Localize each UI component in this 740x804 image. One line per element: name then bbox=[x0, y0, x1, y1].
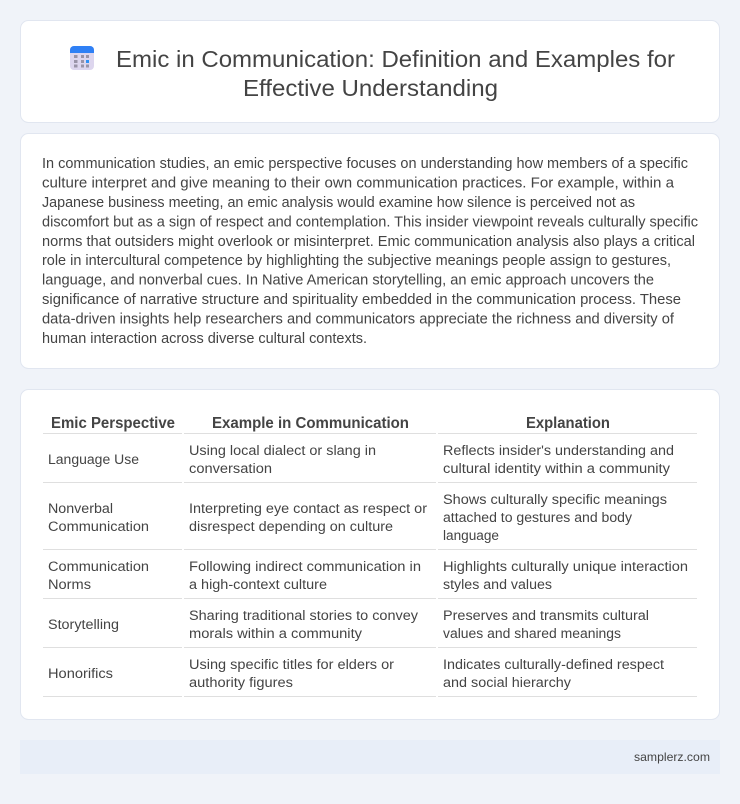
icon: calendar bbox=[70, 46, 94, 70]
table header bbox=[51, 415, 610, 432]
table row: communication norms: a high-context culture bbox=[189, 577, 327, 593]
table row: nonverbal communication: Communication bbox=[48, 519, 149, 535]
text block: introduction paragraph: language, and nonverbal cues. In Native American storytelling, an emic approach uncovers the bbox=[42, 273, 654, 289]
table row: honorifics: authority figures bbox=[189, 675, 293, 691]
table row: honorifics: and social hierarchy bbox=[443, 675, 572, 691]
panel: table card bbox=[20, 390, 720, 720]
text block: introduction paragraph: significance of narrative structure and spirituality embedded in the communication process. These bbox=[42, 292, 681, 308]
table row: language use bbox=[48, 443, 674, 477]
table row: language use: Language Use bbox=[48, 452, 139, 468]
table row: honorifics: Using specific titles for elders or bbox=[189, 657, 394, 673]
table row: language use: Reflects insider's understanding and bbox=[443, 443, 674, 459]
text block: introduction paragraph: Japanese business meeting, an emic analysis would examine how silence is perceived not as bbox=[42, 195, 635, 211]
footer bbox=[20, 740, 720, 774]
table row: storytelling: Sharing traditional stories to convey bbox=[189, 608, 419, 624]
table row: honorifics: Honorifics bbox=[48, 666, 113, 682]
title: Emic in Communication: Definition and Examples for bbox=[116, 46, 675, 72]
table row: storytelling: morals within a community bbox=[189, 626, 363, 642]
table row: nonverbal communication bbox=[48, 492, 667, 544]
table header: Example in Communication bbox=[212, 415, 409, 432]
table row: nonverbal communication: attached to gestures and body bbox=[443, 510, 633, 526]
table row: storytelling: Storytelling bbox=[48, 617, 119, 633]
table row: storytelling bbox=[48, 608, 649, 642]
text block: introduction paragraph: culture interpret and give meaning to their own communication practices. For example, within a bbox=[42, 175, 674, 191]
text block: introduction paragraph: human interaction across diverse cultural contexts. bbox=[42, 331, 367, 347]
table row: nonverbal communication: Interpreting eye contact as respect or bbox=[189, 501, 427, 517]
panel: introduction text bbox=[20, 134, 720, 368]
table row: language use: conversation bbox=[189, 461, 272, 477]
table row: communication norms: Communication bbox=[48, 559, 149, 575]
table row: honorifics bbox=[48, 657, 664, 691]
table row: communication norms: Norms bbox=[48, 577, 91, 593]
text block: introduction paragraph: In communication studies, an emic perspective focuses on understanding how members of a specific bbox=[42, 156, 688, 172]
text block: introduction paragraph bbox=[42, 156, 698, 347]
title: Effective Understanding bbox=[243, 75, 498, 101]
table header: Emic Perspective bbox=[51, 415, 175, 432]
table row: nonverbal communication: disrespect depending on culture bbox=[189, 519, 393, 535]
table row: nonverbal communication: Shows culturally specific meanings bbox=[443, 492, 667, 508]
text block: introduction paragraph: role in intercultural competence by highlighting the subjective meanings people assign to gestures, bbox=[42, 253, 671, 269]
text block: introduction paragraph: data-driven insights help researchers and communicators appreciate the richness and diversity of bbox=[42, 312, 675, 328]
table header: Explanation bbox=[526, 415, 610, 432]
table row: language use: Using local dialect or slang in bbox=[189, 443, 376, 459]
table row: storytelling: Preserves and transmits cultural bbox=[443, 608, 649, 624]
table row: communication norms: Following indirect communication in bbox=[189, 559, 421, 575]
title bbox=[116, 46, 675, 101]
table row: nonverbal communication: Nonverbal bbox=[48, 501, 113, 517]
panel: title card bbox=[20, 20, 720, 122]
table row: language use: cultural identity within a community bbox=[443, 461, 671, 477]
table row: honorifics: Indicates culturally-defined respect bbox=[443, 657, 664, 673]
text block: introduction paragraph: norms that outsiders might overlook or misinterpret. Emic communication analysis also plays a critical bbox=[42, 234, 695, 250]
table row: storytelling: values and shared meanings bbox=[443, 626, 621, 642]
footer: samplerz.com bbox=[634, 750, 710, 764]
table row: nonverbal communication: language bbox=[443, 528, 499, 544]
text block: introduction paragraph: discomfort but as a sign of respect and contemplation. This insider viewpoint reveals culturally specific bbox=[42, 214, 698, 230]
table row: communication norms: Highlights culturally unique interaction bbox=[443, 559, 688, 575]
table row: communication norms bbox=[48, 559, 688, 593]
table row: communication norms: styles and values bbox=[443, 577, 552, 593]
